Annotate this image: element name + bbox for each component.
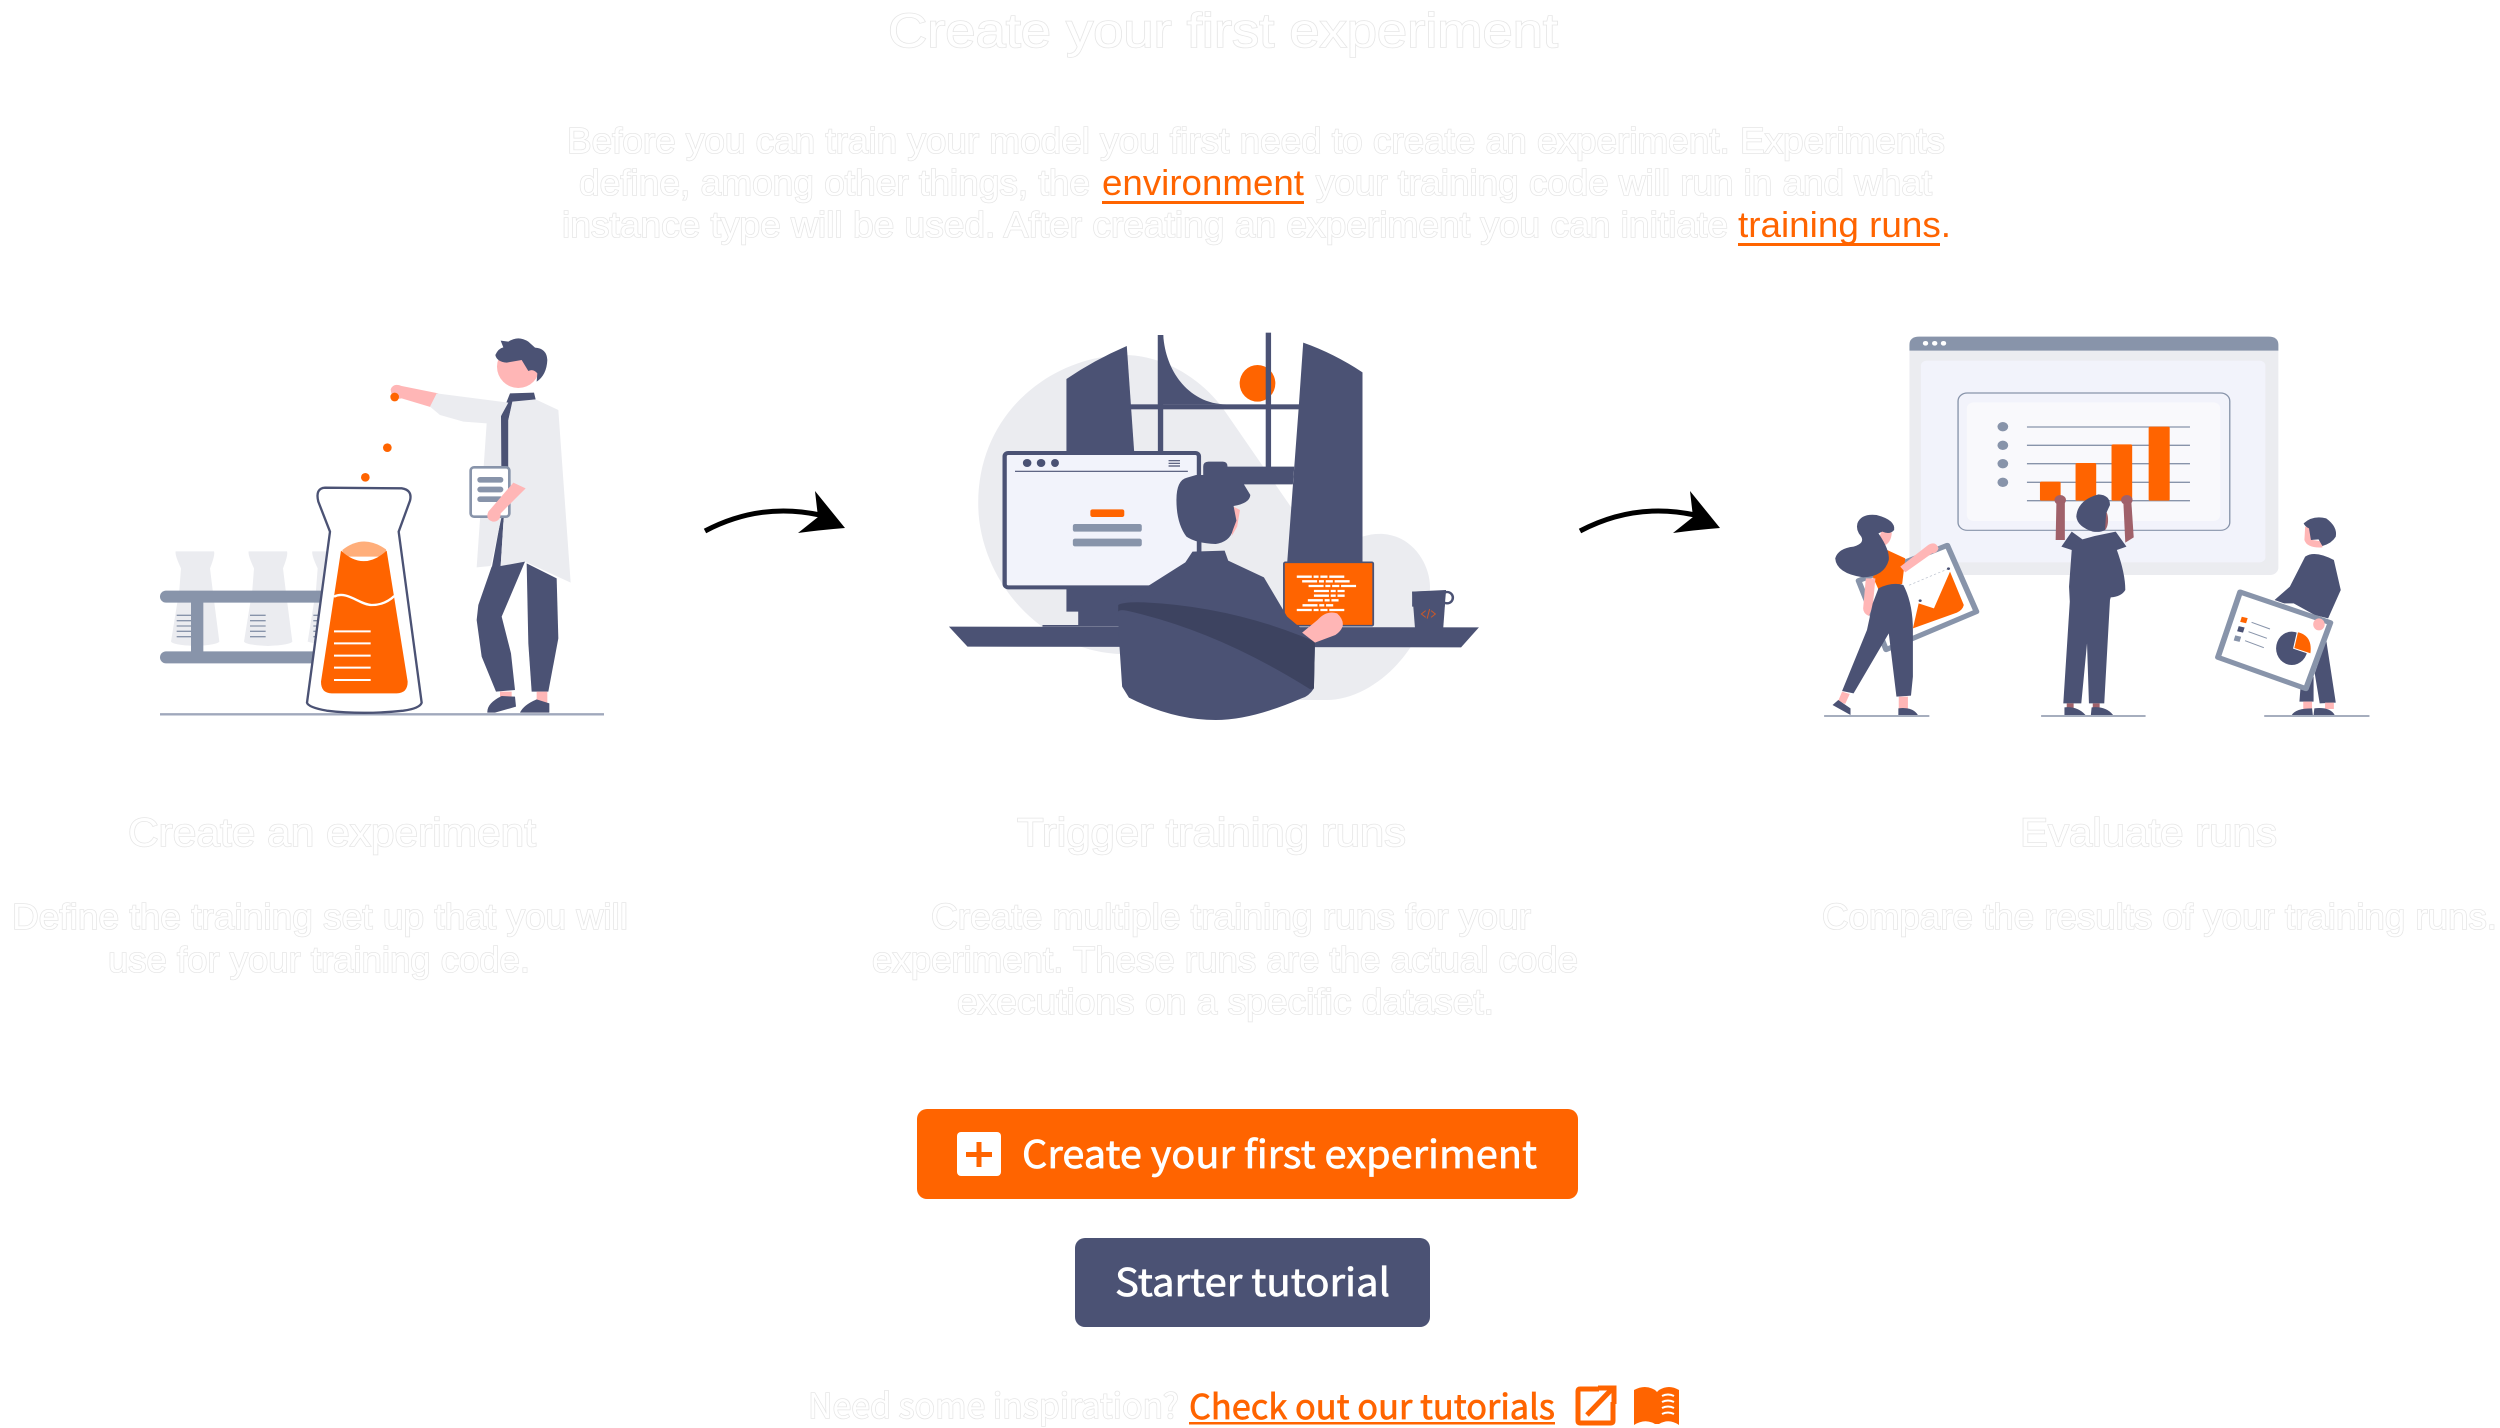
button: starter tutorial: [1075, 1238, 1430, 1327]
step two text: [872, 811, 1578, 1022]
intro paragraph: [562, 120, 1951, 246]
step one text: use for your training code.: [108, 939, 530, 980]
intro paragraph: instance type will be used. After creating an experiment you can initiate: [562, 204, 1728, 245]
tutorials link line: Need some inspiration?: [808, 1379, 1179, 1428]
title: Create your first experiment: [888, 5, 1558, 58]
step one text: [12, 811, 628, 980]
step three text: Compare the results of your training runs.: [1822, 896, 2497, 937]
tutorials link line: [808, 1379, 1555, 1428]
button: create your first experiment: [917, 1109, 1578, 1199]
intro paragraph: environment: [1102, 162, 1304, 203]
intro paragraph: your training code will run in and what: [1316, 162, 1932, 203]
intro paragraph: Before you can train your model you first need to create an experiment. Experiments: [567, 120, 1945, 161]
icon: external link: [1578, 1388, 1614, 1423]
button: create your first experiment: Create your first experiment: [1022, 1124, 1537, 1179]
illustration: team evaluating charts: [1824, 337, 2369, 716]
illustration: developer at desk: [949, 333, 1479, 720]
button: starter tutorial: Starter tutorial: [1115, 1252, 1390, 1307]
step one text: Create an experiment: [128, 811, 536, 855]
intro paragraph: training runs.: [1738, 204, 1951, 245]
step two text: Create multiple training runs for your: [931, 896, 1531, 937]
tutorials link line: Check out our tutorials: [1189, 1380, 1555, 1428]
intro paragraph: define, among other things, the: [579, 162, 1090, 203]
illustration: scientist pouring into flask: [160, 338, 604, 714]
arrow: step two to step three: [1580, 491, 1720, 533]
step three text: Evaluate runs: [2020, 811, 2277, 855]
step three text: [1822, 811, 2497, 937]
step one text: Define the training set up that you will: [12, 896, 628, 937]
arrow: step one to step two: [705, 491, 845, 533]
step two text: executions on a specific dataset.: [957, 981, 1494, 1022]
step two text: experiment. These runs are the actual code: [872, 939, 1578, 980]
step two text: Trigger training runs: [1017, 811, 1406, 855]
icon: open book: [1634, 1387, 1679, 1425]
